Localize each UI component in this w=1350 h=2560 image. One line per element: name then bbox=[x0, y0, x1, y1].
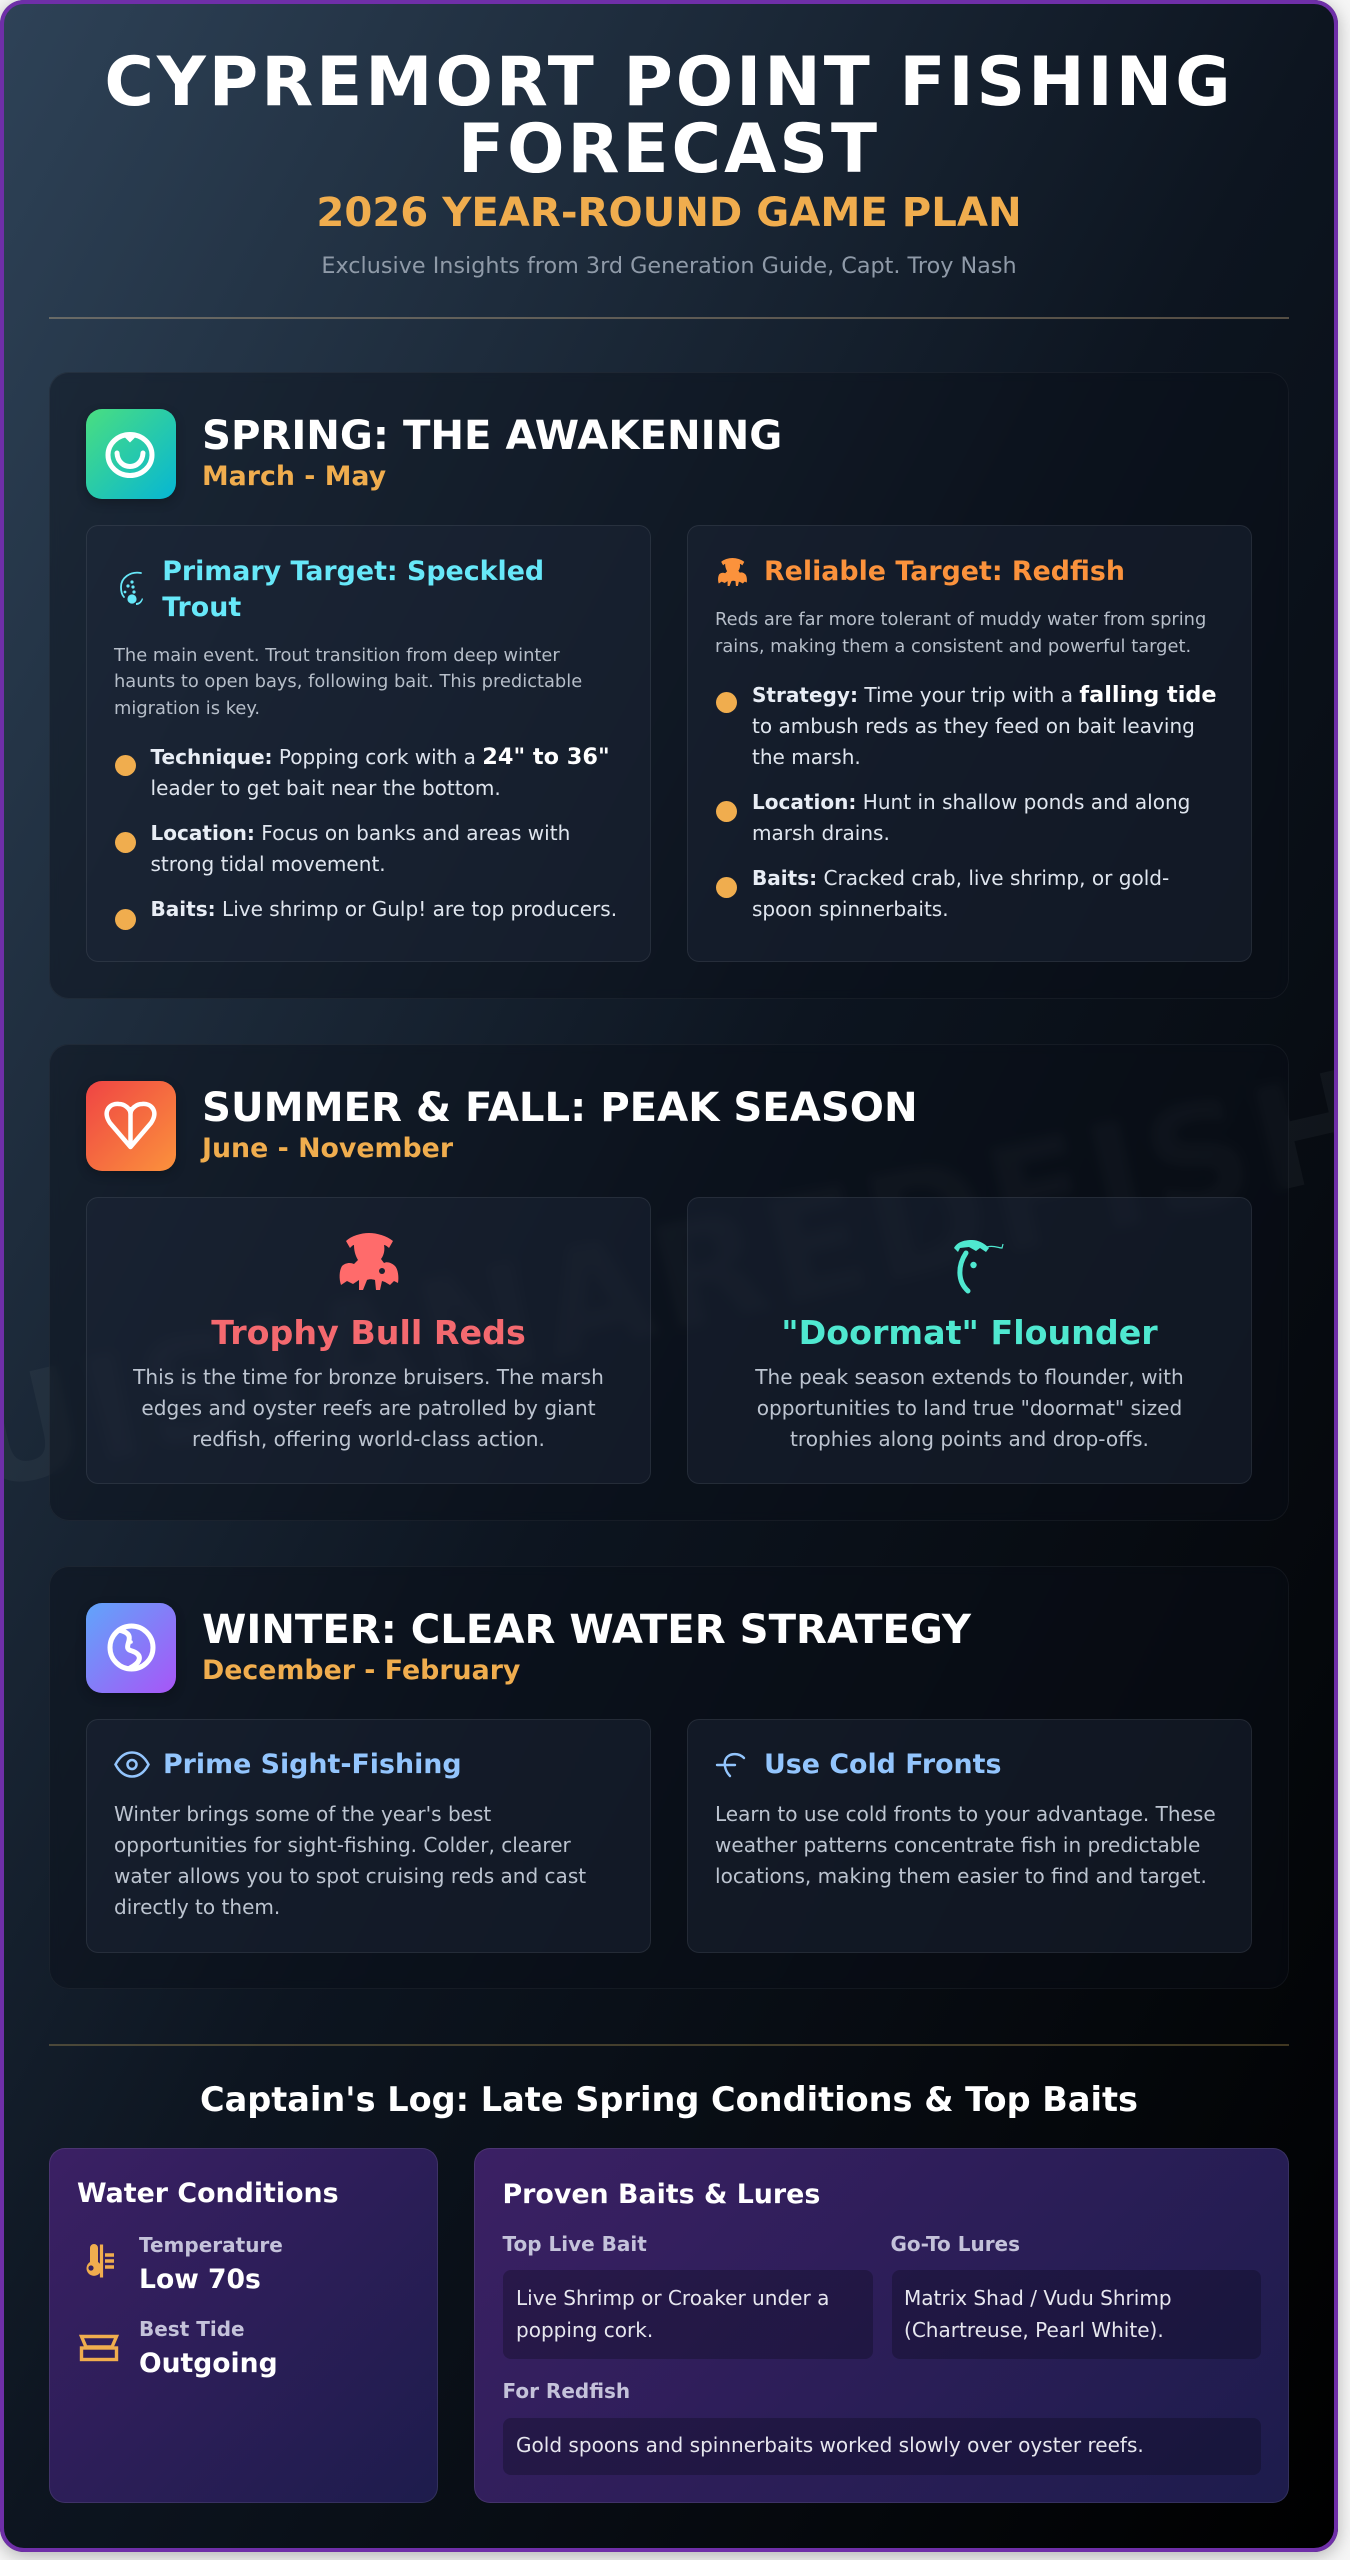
bullet: location bbox=[716, 790, 1190, 845]
description bbox=[755, 1365, 1184, 1451]
bullet: strategy: to ambush reds as they feed on bait leaving bbox=[752, 714, 1195, 738]
card heading: Reliable Target: Redfish bbox=[764, 556, 1125, 587]
heading: captain's log: Captain's Log: Late Spring Conditions & Top Baits bbox=[200, 2080, 1138, 2118]
label: go-to lures: Go-To Lures bbox=[890, 2232, 1020, 2256]
dates: winter: December - February bbox=[202, 1655, 520, 1686]
description bbox=[133, 1365, 604, 1451]
value: temperature: Low 70s bbox=[139, 2264, 261, 2295]
label: best tide: Best Tide bbox=[139, 2317, 245, 2341]
description: opportunities to land true "doormat" sized bbox=[757, 1396, 1182, 1420]
bullet: strategy: Strategy: Time your trip with a falling tide bbox=[752, 682, 1217, 708]
bullet: strategy bbox=[716, 682, 1217, 769]
description: trophies along points and drop-offs. bbox=[790, 1427, 1149, 1451]
panel: water conditions bbox=[49, 2148, 438, 2503]
title bbox=[104, 42, 1234, 188]
icon: thermometer bbox=[84, 2244, 115, 2278]
box: top live bait: Live Shrimp or Croaker under a bbox=[516, 2286, 829, 2310]
bullet: location: strong tidal movement. bbox=[150, 852, 386, 876]
description: Reds are far more tolerant of muddy water from spring bbox=[715, 609, 1206, 630]
bullet: strategy: the marsh. bbox=[752, 745, 861, 769]
box: go-to lures: Matrix Shad / Vudu Shrimp bbox=[904, 2286, 1172, 2310]
icon: flounder bbox=[954, 1240, 1004, 1294]
panel heading: Proven Baits & Lures bbox=[502, 2178, 820, 2210]
description: Learn to use cold fronts to your advantage. These bbox=[715, 1802, 1216, 1826]
description: migration is key. bbox=[114, 698, 260, 719]
description: redfish, offering world-class action. bbox=[192, 1427, 545, 1451]
box: go-to lures bbox=[892, 2270, 1261, 2359]
value: best tide: Outgoing bbox=[139, 2348, 278, 2379]
label: temperature: Temperature bbox=[139, 2232, 283, 2256]
label: top live bait: Top Live Bait bbox=[502, 2232, 647, 2256]
box: go-to lures: (Chartreuse, Pearl White). bbox=[904, 2318, 1164, 2342]
card: doormat flounder bbox=[687, 1197, 1252, 1484]
description: The main event. Trout transition from deep winter bbox=[114, 644, 560, 666]
icon: winter bbox=[86, 1603, 176, 1693]
description bbox=[114, 644, 582, 719]
icon: redfish bbox=[718, 558, 747, 586]
subtitle: 2026 YEAR-ROUND GAME PLAN bbox=[316, 190, 1022, 236]
bullet: technique bbox=[115, 744, 610, 800]
description: rains, making them a consistent and powerful target. bbox=[715, 636, 1191, 657]
heading: summer: SUMMER & FALL: PEAK SEASON bbox=[202, 1085, 918, 1131]
dates: summer: June - November bbox=[202, 1133, 453, 1164]
bullet: location: Location: Focus on banks and areas with bbox=[150, 821, 570, 845]
icon: bull red bbox=[340, 1233, 398, 1290]
icon: eye bbox=[114, 1751, 150, 1778]
description: Winter brings some of the year's best bbox=[114, 1802, 491, 1826]
description: haunts to open bays, following bait. This predictable bbox=[114, 671, 582, 692]
card: cold fronts bbox=[687, 1719, 1252, 1953]
title: CYPREMORT POINT FISHING bbox=[104, 42, 1234, 121]
description bbox=[114, 1799, 586, 1923]
card: redfish bbox=[687, 525, 1252, 962]
box: top live bait bbox=[502, 2270, 872, 2359]
description: The peak season extends to flounder, with bbox=[755, 1365, 1184, 1389]
heading: spring: SPRING: THE AWAKENING bbox=[202, 413, 782, 459]
icon: spring bbox=[86, 409, 176, 499]
box: for redfish bbox=[502, 2418, 1261, 2475]
description: directly to them. bbox=[114, 1895, 280, 1919]
bullet: location: Location: Hunt in shallow ponds and along bbox=[752, 790, 1190, 814]
icon: tide bbox=[80, 2335, 118, 2361]
panel: winter bbox=[49, 1566, 1289, 1989]
bullet: baits: spoon spinnerbaits. bbox=[752, 897, 949, 921]
card heading: Trophy Bull Reds bbox=[211, 1313, 526, 1352]
card: trophy bull reds bbox=[86, 1197, 651, 1484]
icon: cold front bbox=[716, 1753, 744, 1777]
card: sight-fishing bbox=[86, 1719, 651, 1953]
bullet: baits: Baits: Live shrimp or Gulp! are top producers. bbox=[150, 897, 617, 921]
card: speckled trout bbox=[86, 525, 651, 962]
icon: summer bbox=[86, 1081, 176, 1171]
title: FORECAST bbox=[458, 109, 880, 188]
card heading: Primary Target: Speckled bbox=[162, 556, 544, 587]
description bbox=[715, 1799, 1216, 1892]
bullet: location bbox=[115, 821, 570, 876]
dates: spring: March - May bbox=[202, 461, 386, 492]
box: for redfish: Gold spoons and spinnerbaits worked slowly over oyster reefs. bbox=[516, 2433, 1144, 2457]
description: locations, making them easier to find and target. bbox=[715, 1864, 1207, 1888]
card heading: Prime Sight-Fishing bbox=[163, 1749, 462, 1780]
description: This is the time for bronze bruisers. The marsh bbox=[133, 1365, 604, 1389]
bullet: location: marsh drains. bbox=[752, 821, 890, 845]
card heading: "Doormat" Flounder bbox=[781, 1313, 1158, 1352]
panel heading: Water Conditions bbox=[77, 2178, 339, 2209]
icon: trout bbox=[120, 572, 143, 605]
panel: spring bbox=[49, 372, 1289, 999]
description: weather patterns concentrate fish in predictable bbox=[715, 1833, 1200, 1857]
bullet: technique: leader to get bait near the bottom. bbox=[150, 776, 501, 800]
card heading: Trout bbox=[162, 592, 241, 623]
bullet: baits: Baits: Cracked crab, live shrimp, or gold- bbox=[752, 866, 1169, 890]
card heading: Use Cold Fronts bbox=[764, 1749, 1001, 1780]
card heading bbox=[162, 556, 544, 623]
panel: summer and fall bbox=[49, 1044, 1289, 1521]
tagline: Exclusive Insights from 3rd Generation Guide, Capt. Troy Nash bbox=[321, 253, 1017, 279]
description: edges and oyster reefs are patrolled by giant bbox=[141, 1396, 596, 1420]
bullet: baits bbox=[716, 866, 1169, 921]
description: water allows you to spot cruising reds and cast bbox=[114, 1864, 586, 1888]
description: opportunities for sight-fishing. Colder, clearer bbox=[114, 1833, 571, 1857]
panel: baits and lures bbox=[474, 2148, 1289, 2503]
heading: winter: WINTER: CLEAR WATER STRATEGY bbox=[202, 1607, 971, 1653]
label: for redfish: For Redfish bbox=[502, 2379, 630, 2403]
box: top live bait: popping cork. bbox=[516, 2318, 653, 2342]
header bbox=[104, 42, 1234, 279]
bullet: technique: Technique: Popping cork with a 24" to 36" bbox=[150, 744, 610, 770]
description bbox=[715, 609, 1206, 657]
bullet: baits bbox=[115, 897, 617, 930]
